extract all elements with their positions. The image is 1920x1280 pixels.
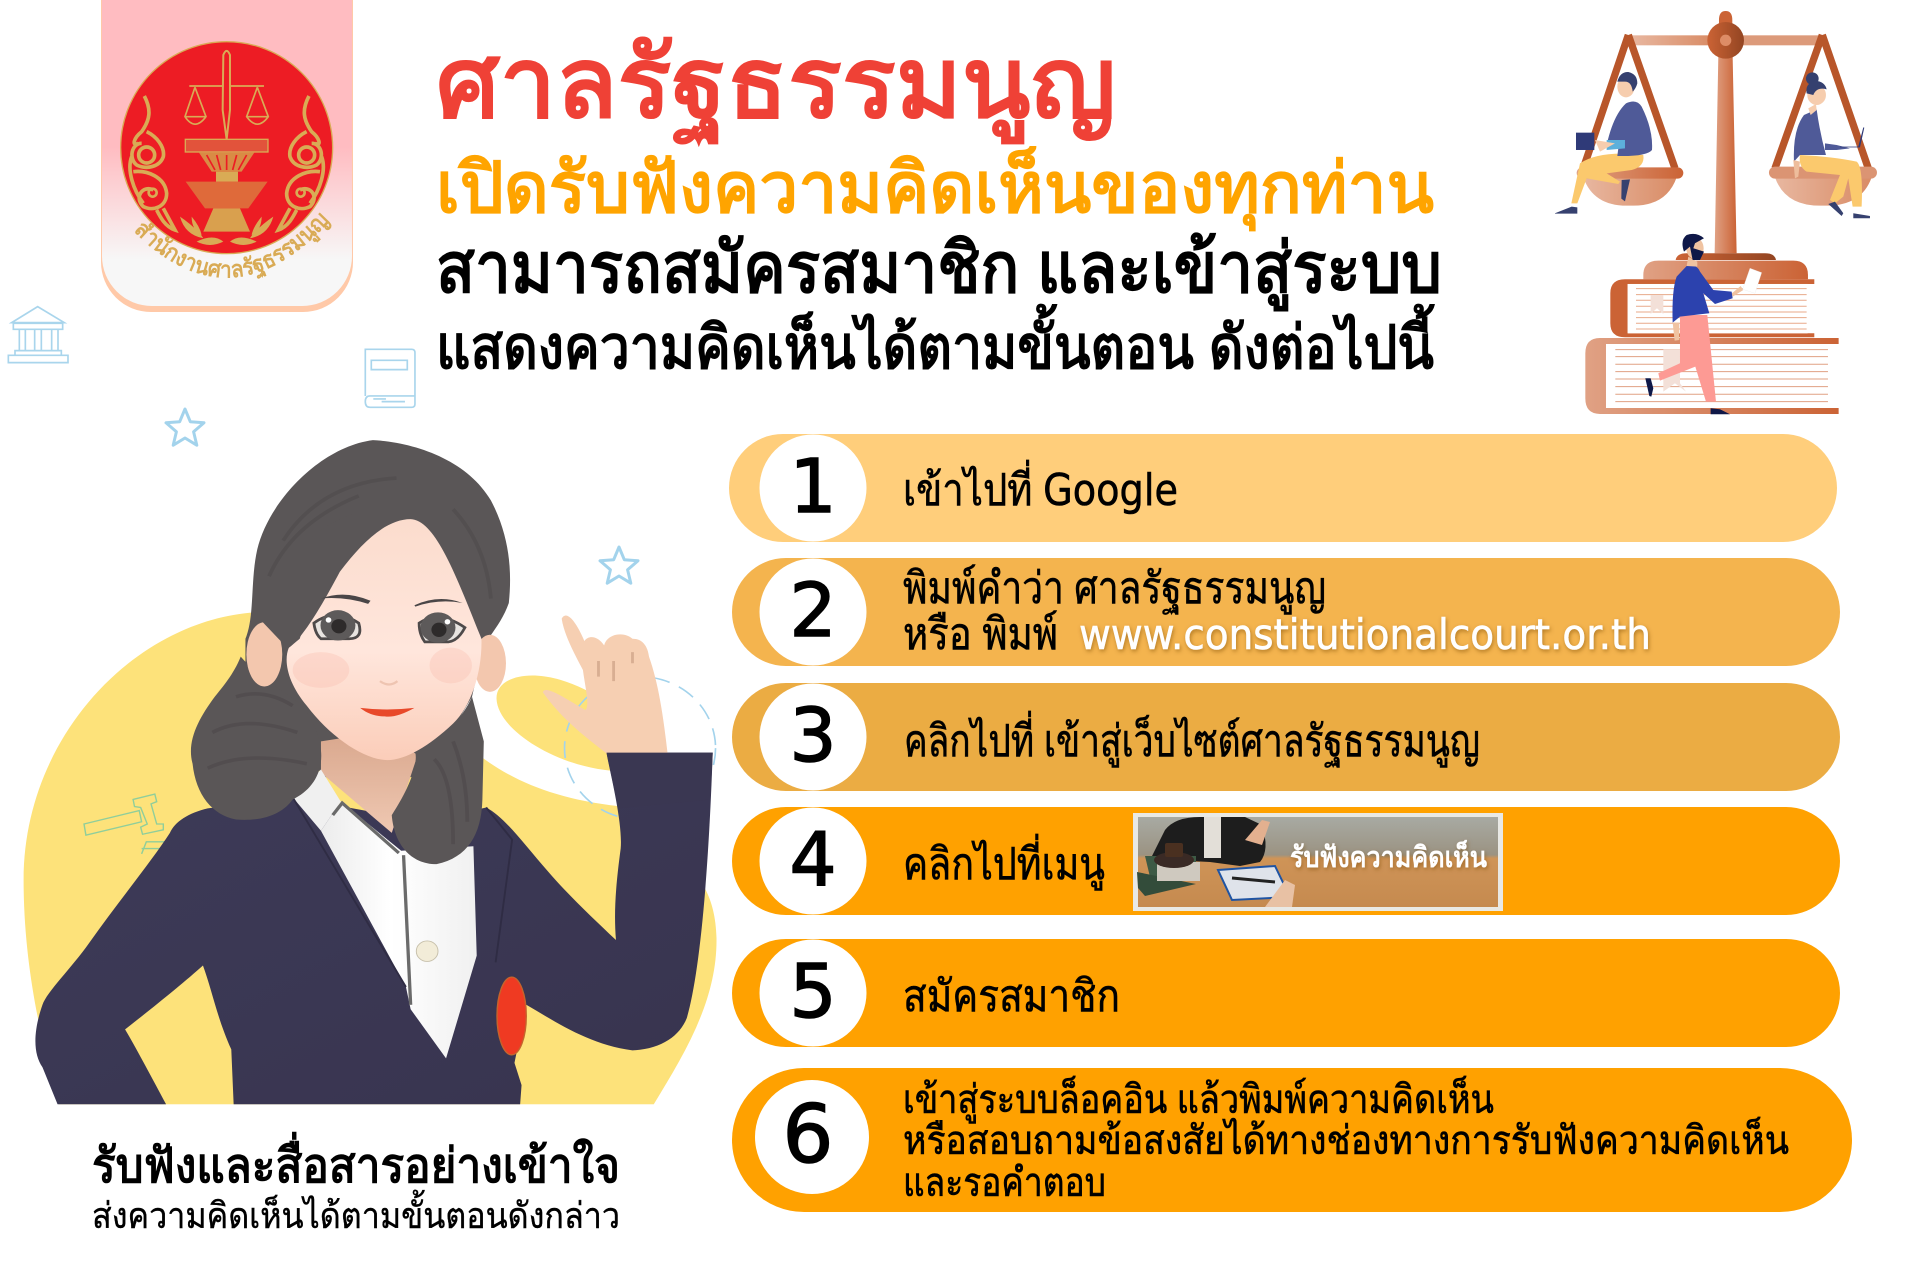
- shirt body: [321, 802, 477, 1058]
- dashed orbit: [565, 677, 716, 820]
- icon: gavel: [83, 793, 164, 854]
- step 3: คลิกไปที่ เข้าสู่เว็บไซต์ศาลรัฐธรรมนูญ: [904, 710, 1480, 768]
- step 6: 6: [783, 1088, 833, 1181]
- eyebrows: [321, 595, 371, 604]
- text: office name on seal: สำนักงานศาลรัฐธรรมนูญ: [135, 212, 332, 279]
- step 3: [732, 683, 1840, 791]
- yellow blob background: [24, 612, 717, 1104]
- hand: [543, 616, 668, 756]
- scroll ornament left: [130, 96, 175, 230]
- illustration: woman character: [24, 440, 717, 1104]
- eye right: [419, 612, 465, 643]
- hair strand: [262, 622, 301, 648]
- step 5: สมัครสมาชิก: [903, 972, 1120, 1021]
- person walking: [1645, 234, 1762, 414]
- icon: book: [365, 349, 415, 407]
- lapel lines: [293, 798, 513, 987]
- hair back: [245, 440, 510, 777]
- neck: [321, 732, 418, 833]
- left pan: [1577, 35, 1683, 206]
- shirt collar: [293, 770, 341, 831]
- step 4: 4: [789, 817, 837, 903]
- step 2: หรือ พิมพ์: [903, 610, 1058, 659]
- step 5: [732, 939, 1840, 1047]
- icon: courthouse: [8, 307, 68, 363]
- scale beam: [1632, 11, 1823, 253]
- heading line: steps: แสดงความคิดเห็นได้ตามขั้นตอน ดังต่อไปนี้: [436, 303, 1436, 381]
- step 4: [732, 807, 1840, 915]
- blush: [293, 652, 349, 688]
- person right: [1793, 72, 1870, 218]
- step 6: หรือสอบถามข้อสงสัยได้ทางช่องทางการรับฟังความคิดเห็น: [903, 1116, 1789, 1163]
- mouth: [360, 708, 414, 717]
- subtitle: เปิดรับฟังความคิดเห็นของทุกท่าน: [436, 145, 1434, 232]
- menu banner image: [1133, 813, 1503, 911]
- menu banner image: รับฟังความคิดเห็น: [1290, 839, 1487, 874]
- yellow swirl: [496, 676, 610, 771]
- nose: [380, 681, 397, 684]
- step 2: 2: [789, 568, 837, 654]
- title: ศาลรัฐธรรมนูญ: [436, 27, 1116, 148]
- step 1: 1: [789, 444, 837, 530]
- step 5: 5: [789, 949, 837, 1035]
- hair lobe shading: [208, 694, 467, 844]
- caption heading: รับฟังและสื่อสารอย่างเข้าใจ: [92, 1131, 620, 1193]
- sleeve cuff: [606, 752, 713, 786]
- hair shading: [269, 478, 491, 599]
- face: [287, 519, 481, 760]
- step 4: คลิกไปที่เมนู: [903, 833, 1105, 891]
- step 3: 3: [789, 693, 837, 779]
- ears: [246, 622, 282, 687]
- icon: star right: [600, 547, 638, 583]
- jacket: [35, 753, 713, 1104]
- step 1: [729, 434, 1837, 542]
- shirt button: [416, 941, 438, 961]
- icon: constitutional court seal: [121, 42, 333, 254]
- eye left: [314, 610, 360, 641]
- icon: star left: [166, 409, 204, 445]
- right pan: [1769, 35, 1877, 206]
- caption text: ส่งความคิดเห็นได้ตามขั้นตอนดังกล่าว: [92, 1189, 620, 1236]
- book stack: [1585, 253, 1839, 414]
- heading line: register: สามารถสมัครสมาชิก และเข้าสู่ระบบ: [436, 229, 1442, 312]
- badge: [497, 977, 526, 1055]
- illustration: scales, books and people: [1555, 11, 1877, 414]
- step 6: และรอคำตอบ: [903, 1161, 1106, 1205]
- hair lobe left: [191, 657, 321, 820]
- hair lobe right: [392, 697, 484, 864]
- panel: logo card: [101, 0, 353, 312]
- step 2: www.constitutionalcourt.or.th: [1079, 610, 1651, 659]
- step 2: พิมพ์คำว่า ศาลรัฐธรรมนูญ: [903, 564, 1326, 615]
- step 6: [732, 1068, 1852, 1212]
- person left: [1555, 72, 1652, 214]
- step 2: [732, 558, 1840, 666]
- scroll ornament right: [278, 96, 323, 230]
- step 1: เข้าไปที่ Google: [903, 459, 1178, 516]
- step 6: เข้าสู่ระบบล็อคอิน แล้วพิมพ์ความคิดเห็น: [903, 1075, 1494, 1123]
